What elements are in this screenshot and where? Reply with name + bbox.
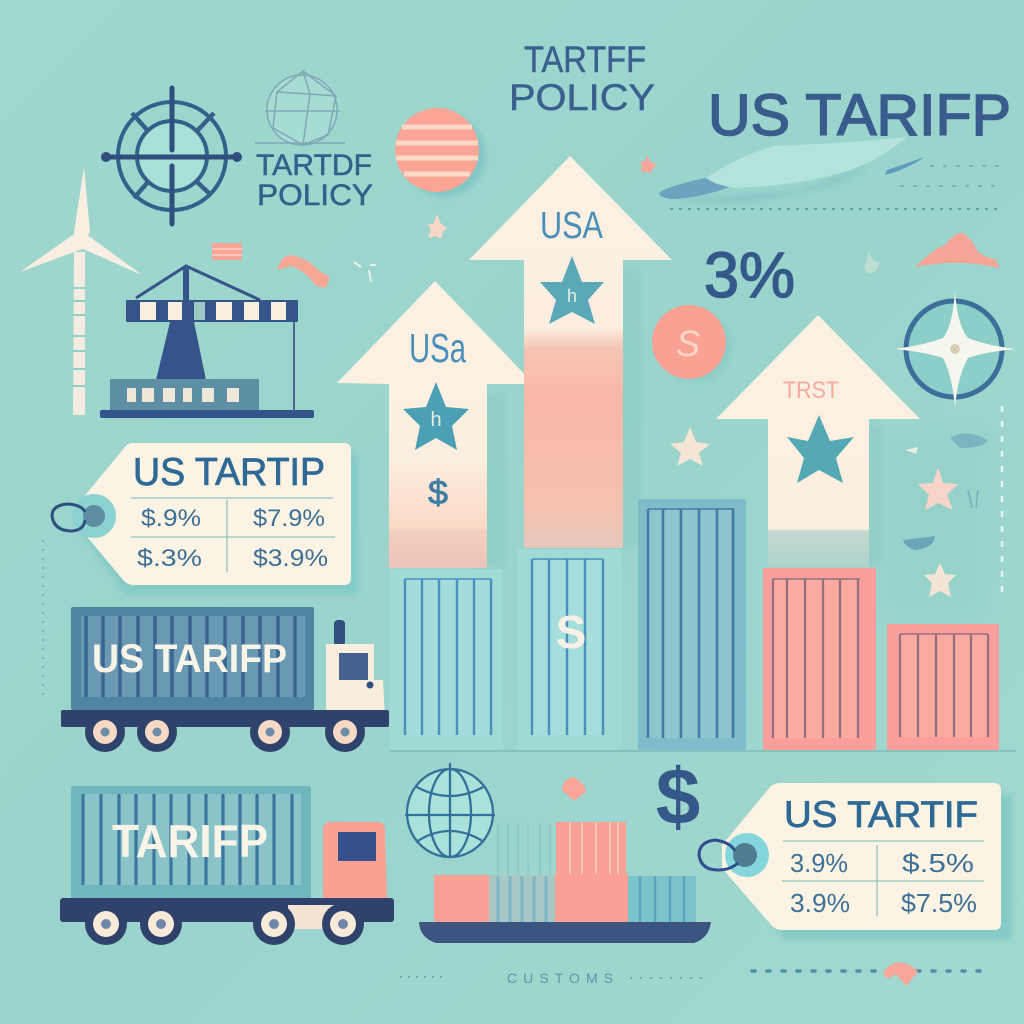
- truck bottom: [60, 786, 394, 945]
- icon: compass: [894, 290, 1016, 407]
- title: TARTFF POLICY: POLICY: [509, 77, 655, 118]
- tag values: $7.9%: [253, 505, 325, 532]
- white dashed vertical: [1001, 406, 1003, 597]
- icon: dollar sign: $: [656, 752, 700, 841]
- icon: small flag: [212, 243, 242, 260]
- title: TARTFF POLICY: [509, 39, 655, 118]
- tag values: $.3%: [137, 545, 202, 572]
- cab: [334, 620, 345, 646]
- dotted rule: [670, 208, 1003, 210]
- icon: globe: [405, 763, 495, 857]
- footer caption: CUSTOMS: [507, 970, 613, 986]
- tag title: US TARTIF: [784, 794, 978, 835]
- heading: TARTDF POLICY: TARTDF: [256, 149, 372, 182]
- container bar 2: [517, 549, 621, 750]
- tag values: 3.9%: [790, 888, 850, 918]
- container bar 5: [887, 624, 999, 750]
- container bar 1: [390, 569, 503, 750]
- dotted left guide: [42, 540, 44, 695]
- label: USA: USA: [540, 205, 604, 247]
- container bar 3: [638, 499, 746, 750]
- crane dock: [100, 266, 314, 418]
- container bar 4: [763, 568, 876, 750]
- label: USa: USa: [409, 325, 466, 371]
- small star peach: [640, 155, 658, 174]
- truck label: US TARIFP: [92, 637, 287, 681]
- faint marks: [354, 262, 376, 282]
- icon: striped peach ball: [395, 108, 486, 197]
- title: US TARIFP: US TARIFP: [708, 83, 1011, 148]
- title: TARTFF POLICY: TARTFF: [524, 39, 646, 80]
- cab: [323, 822, 387, 898]
- small star cream: [427, 214, 447, 239]
- truck top: [61, 607, 389, 752]
- tag values: $7.5%: [901, 888, 977, 918]
- coral curved mark: [277, 255, 330, 288]
- soft darker zone behind bars: [880, 430, 990, 620]
- heading: TARTDF POLICY: [256, 149, 373, 212]
- star teal: [787, 415, 854, 483]
- tag values: [790, 848, 977, 918]
- star glyph: h: [567, 286, 577, 306]
- arrow: USA left: [337, 281, 534, 568]
- arrow: USA center: [469, 156, 672, 548]
- stat: 3%: 3%: [704, 239, 795, 311]
- tag title: US TARTIP: [133, 451, 325, 494]
- arrow shadows: [475, 268, 882, 568]
- icon: crosshair target: [101, 88, 242, 224]
- heading: TARTDF POLICY: POLICY: [257, 179, 373, 212]
- stars right decor: [670, 427, 958, 597]
- small leaf mark: [865, 252, 879, 274]
- star glyph: h: [430, 409, 442, 431]
- coin: dollar: S: [676, 323, 700, 364]
- dollar label: S: [556, 606, 586, 658]
- tag table lines: [131, 498, 335, 572]
- arrow: right TRST: [716, 315, 920, 568]
- footer dots right: [752, 962, 990, 986]
- price tag right: [699, 783, 1012, 940]
- tag values: [137, 505, 328, 572]
- truck label: TARIFP: [112, 815, 268, 867]
- price tag left: [52, 443, 358, 594]
- cargo ship: [419, 822, 711, 943]
- tag values: 3.9%: [790, 848, 848, 878]
- footer dots middle: [630, 977, 705, 979]
- icon: coral mountain: [915, 233, 1000, 268]
- tag values: $.5%: [902, 848, 974, 878]
- tag values: $3.9%: [253, 545, 328, 572]
- footer dots left: [400, 976, 445, 978]
- dotted detail lines: [900, 166, 1002, 186]
- ground line: [390, 750, 1016, 752]
- coin: dollar: [652, 305, 732, 383]
- icon: wind turbine: [20, 167, 142, 415]
- dollar: $: [428, 474, 448, 512]
- tag values: $.9%: [141, 505, 201, 532]
- tag table lines: [782, 841, 984, 916]
- small diamond marker: [562, 777, 586, 801]
- chassis and wheels: [60, 898, 394, 922]
- label: TRST: TRST: [783, 377, 839, 404]
- icon: wire globe: [255, 71, 345, 145]
- star teal: [403, 382, 469, 450]
- chassis and wheels: [61, 710, 389, 727]
- star teal: [540, 256, 604, 324]
- icon: paper plane wing: [659, 137, 925, 204]
- faint sketch marks right: [903, 433, 988, 550]
